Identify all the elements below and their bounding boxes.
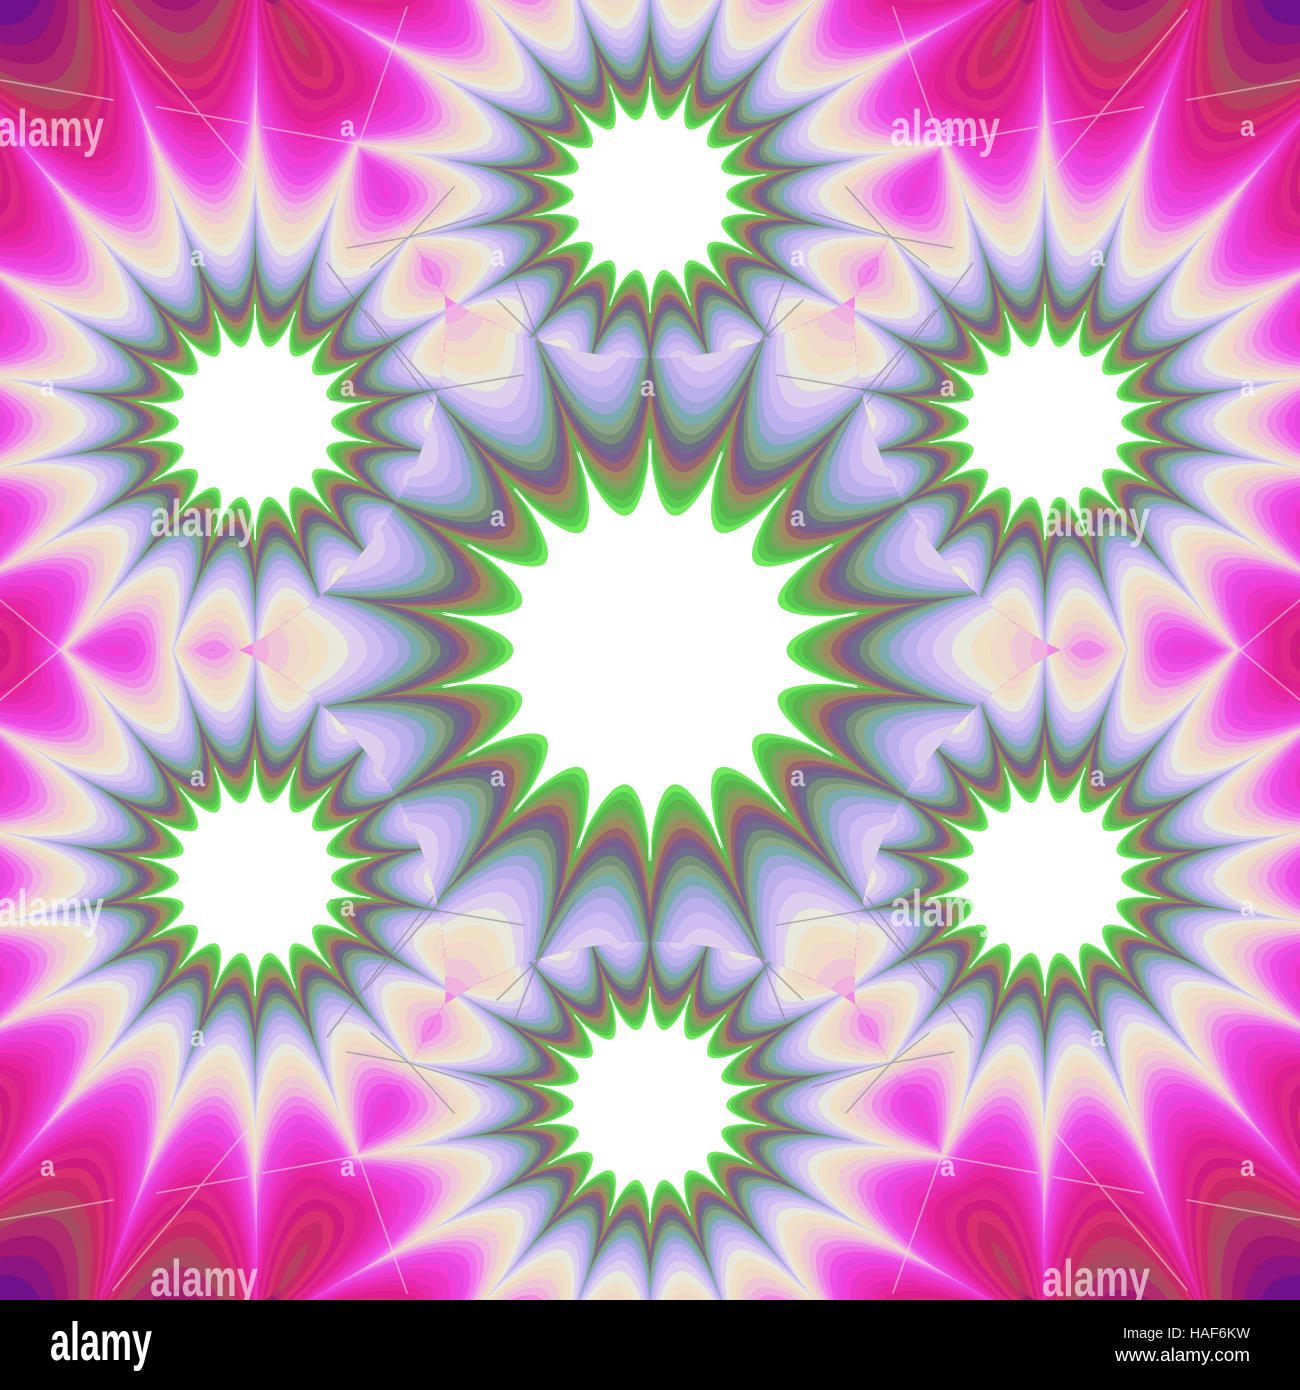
watermarks: a: [1090, 760, 1105, 793]
watermarks: a: [490, 240, 505, 273]
watermarks: a: [190, 760, 205, 793]
watermarks: a: [940, 370, 955, 403]
watermarks: a: [1240, 1150, 1255, 1183]
watermarks: a: [40, 1150, 55, 1183]
watermarks: a: [40, 370, 55, 403]
website: www.alamy.com: [1114, 1345, 1250, 1365]
watermarks: a: [340, 370, 355, 403]
footer logo: alamy: [50, 1312, 152, 1372]
watermarks: alamy: [0, 880, 104, 938]
watermarks: a: [490, 500, 505, 533]
watermarks: a: [1240, 110, 1255, 143]
watermarks: a: [640, 370, 655, 403]
watermarks: alamy: [150, 490, 258, 548]
watermarks: a: [190, 1020, 205, 1053]
watermarks: a: [490, 760, 505, 793]
watermarks: a: [940, 1150, 955, 1183]
watermarks: alamy: [1042, 490, 1150, 548]
watermarks: a: [340, 890, 355, 923]
watermarks: a: [340, 1150, 355, 1183]
watermarks: a: [190, 240, 205, 273]
watermarks: alamy: [1042, 1250, 1150, 1308]
watermarks: a: [1090, 1020, 1105, 1053]
watermarks: alamy: [0, 100, 104, 158]
watermarks: a: [940, 110, 955, 143]
watermarks: a: [790, 760, 805, 793]
watermarks: a: [1240, 370, 1255, 403]
watermarks: alamy: [150, 1250, 258, 1308]
watermarks: a: [790, 240, 805, 273]
watermarks: a: [1240, 890, 1255, 923]
watermarks: alamy: [890, 100, 1000, 158]
watermarks: a: [1090, 240, 1105, 273]
watermarks: a: [640, 1150, 655, 1183]
image id: Image ID: HAF6KW: [1123, 1325, 1251, 1342]
watermarks: a: [340, 110, 355, 143]
watermarks: a: [790, 500, 805, 533]
footer bar: [0, 1300, 1300, 1390]
watermarks: alamy: [890, 880, 1000, 938]
